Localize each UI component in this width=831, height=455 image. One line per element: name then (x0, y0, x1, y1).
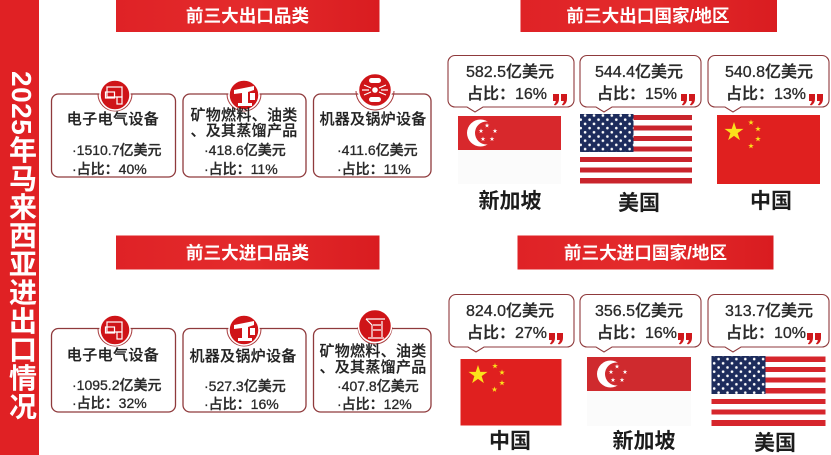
flag: China export (717, 115, 820, 184)
callout: USA export: 占比：15% (597, 85, 677, 103)
panel: export category mineral fuels: ·418.6亿美元 (204, 142, 286, 158)
panel: export category mineral fuels: 、及其蒸馏产品 (190, 122, 298, 140)
callout: China export (708, 56, 829, 112)
callout: China export: 540.8亿美元 (725, 63, 813, 81)
heading: top export countries (520, 0, 777, 32)
flag: China import (460, 359, 562, 426)
heading: top export categories (116, 0, 380, 32)
title: 2025年马来西亚进出口情况 (6, 71, 37, 420)
flag: USA export (580, 114, 692, 184)
panel: export category mineral fuels: ·占比：11% (204, 161, 278, 177)
icon: oil drum (358, 310, 392, 344)
panel: import category mineral fuels: ·407.8亿美元 (337, 378, 419, 394)
heading: top import categories (116, 236, 380, 270)
icon: quote mark (681, 94, 695, 106)
panel: export category electronics: ·1510.7亿美元 (72, 142, 161, 158)
callout: China import: 824.0亿美元 (466, 302, 554, 320)
panel: export category electronics (52, 80, 176, 177)
label: USA: 美国 (754, 432, 796, 455)
label: China: 中国 (489, 430, 531, 453)
panel: import category electronics (52, 315, 176, 412)
panel: export category mineral fuels (183, 80, 306, 177)
icon: quote mark (678, 333, 692, 344)
icon: machinery (227, 80, 261, 111)
callout: USA import: 占比：10% (726, 324, 806, 342)
panel: export category machinery: 机器及锅炉设备 (319, 111, 427, 128)
panel: import category machinery: ·527.3亿美元 (204, 378, 286, 394)
callout: Singapore export: 占比：16% (467, 85, 547, 103)
label: China: 中国 (750, 190, 792, 213)
callout: China import: 占比：27% (467, 324, 547, 342)
label: Singapore: 新加坡 (478, 189, 542, 213)
panel: import category machinery: ·占比：16% (204, 396, 279, 412)
panel: import category electronics: ·占比：32% (72, 395, 147, 411)
callout: Singapore import: 356.5亿美元 (595, 302, 683, 320)
callout: USA import (708, 294, 829, 352)
panel: import category mineral fuels: 、及其蒸馏产品 (319, 359, 427, 376)
icon: machinery (227, 315, 261, 346)
panel: export category electronics: ·占比：40% (72, 161, 147, 177)
icon: quote mark (807, 333, 821, 344)
panel: import category electronics: ·1095.2亿美元 (72, 377, 161, 393)
icon: quote mark (553, 94, 567, 106)
icon: electronics (98, 315, 132, 346)
callout: Singapore import (580, 294, 701, 352)
panel: export category machinery: ·占比：11% (337, 161, 411, 177)
callout: China import (449, 294, 574, 352)
callout: USA import: 313.7亿美元 (725, 302, 813, 320)
callout: Singapore export: 582.5亿美元 (466, 63, 554, 81)
callout: USA export (580, 56, 701, 112)
panel: vertical title sidebar (0, 0, 39, 455)
flag: Singapore export (458, 116, 561, 184)
icon: quote mark (809, 94, 823, 106)
panel: export category electronics: 电子电气设备 (67, 111, 159, 128)
panel: import category machinery (183, 315, 306, 412)
callout: Singapore export (448, 56, 574, 112)
icon: electronics (98, 80, 132, 111)
panel: import category machinery: 机器及锅炉设备 (189, 348, 297, 365)
panel: import category mineral fuels (314, 310, 431, 412)
panel: import category electronics: 电子电气设备 (67, 347, 159, 364)
heading: top import countries (518, 236, 774, 270)
icon: quote mark (549, 333, 563, 344)
heading: top import countries: 前三大进口国家/地区 (564, 243, 727, 263)
heading: top export countries: 前三大出口国家/地区 (566, 6, 730, 26)
callout: Singapore import: 占比：16% (597, 324, 677, 342)
panel: export category machinery (314, 74, 431, 177)
panel: import category mineral fuels: ·占比：12% (337, 396, 412, 412)
heading: top export categories: 前三大出口品类 (186, 6, 309, 26)
heading: top import categories: 前三大进口品类 (186, 243, 309, 263)
callout: USA export: 544.4亿美元 (595, 63, 683, 81)
panel: import category mineral fuels: 矿物燃料、油类 (319, 342, 427, 360)
label: Singapore: 新加坡 (612, 429, 676, 453)
icon: boiler (356, 74, 394, 110)
label: USA: 美国 (618, 192, 660, 215)
callout: China export: 占比：13% (726, 85, 806, 103)
panel: export category mineral fuels: 矿物燃料、油类 (190, 106, 298, 124)
flag: Singapore import (587, 357, 691, 426)
flag: USA import (712, 356, 826, 426)
panel: export category machinery: ·411.6亿美元 (337, 142, 418, 158)
